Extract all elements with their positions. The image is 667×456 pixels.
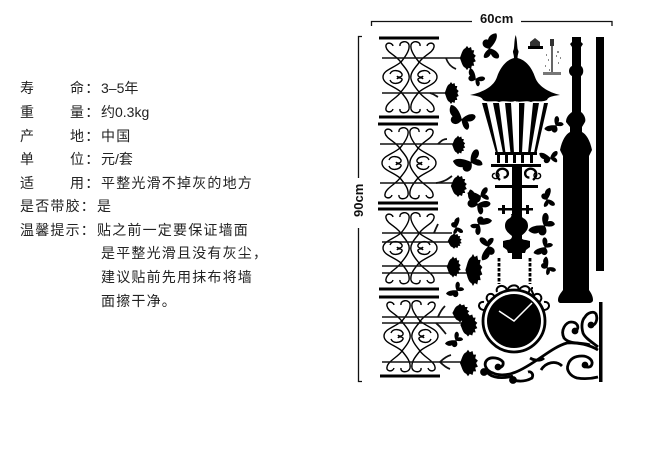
spec: weight: 重 [20, 104, 35, 120]
height dimension: 90cm: 90cm [351, 184, 366, 217]
spec: lifespan: 命： [70, 80, 100, 96]
small thumbnail icons [528, 38, 561, 75]
butterflies [445, 33, 566, 351]
spec: suitable surfaces: 平整光滑不掉灰的地方 [101, 175, 253, 191]
spec: origin: 中国 [101, 128, 131, 144]
lamp base [491, 152, 541, 259]
spec: lifespan: 寿 [20, 80, 35, 96]
spec: suitable surfaces: 适 [20, 175, 35, 191]
lamp cage [482, 103, 548, 153]
spec: unit: 位： [70, 151, 100, 167]
spec text block [20, 80, 268, 309]
spec: tips: 温馨提示： [20, 222, 96, 238]
lamp finials and bulbs [498, 205, 533, 259]
clock chains [499, 258, 530, 284]
lamp roof [470, 35, 560, 102]
lamp post [558, 37, 593, 303]
spec: adhesive: 是否带胶： [20, 198, 96, 214]
clock scrollwork [479, 285, 549, 310]
street lamp [470, 35, 560, 259]
spec: suitable surfaces: 用： [70, 175, 100, 191]
spec: unit: 元/套 [101, 151, 133, 167]
ornate corner bracket [482, 302, 602, 382]
spec: tips: 是平整光滑且没有灰尘， [101, 245, 268, 261]
spec: tips: 面擦干净。 [101, 293, 177, 309]
spec: tips: 贴之前一定要保证墙面 [97, 222, 249, 238]
width dimension: 60cm: 60cm [480, 11, 513, 26]
hanging clock [479, 258, 549, 352]
flower stems and blossoms [380, 46, 482, 376]
clock face [483, 290, 545, 352]
spec: origin: 地： [70, 128, 100, 144]
spec: weight: 量： [70, 104, 100, 120]
clock hands [499, 303, 532, 321]
spec: adhesive: 是 [97, 198, 112, 214]
height dimension: 90cm [351, 36, 366, 382]
decorative fence panel [378, 36, 440, 378]
spec: weight: 约0.3kg [101, 104, 149, 120]
spec: lifespan: 3–5年 [101, 80, 138, 96]
width dimension: 60cm [372, 11, 612, 26]
spec: origin: 产 [20, 128, 35, 144]
vertical strip [596, 37, 604, 271]
spec: tips: 建议贴前先用抹布将墙 [101, 269, 253, 285]
spec: unit: 单 [20, 151, 35, 167]
